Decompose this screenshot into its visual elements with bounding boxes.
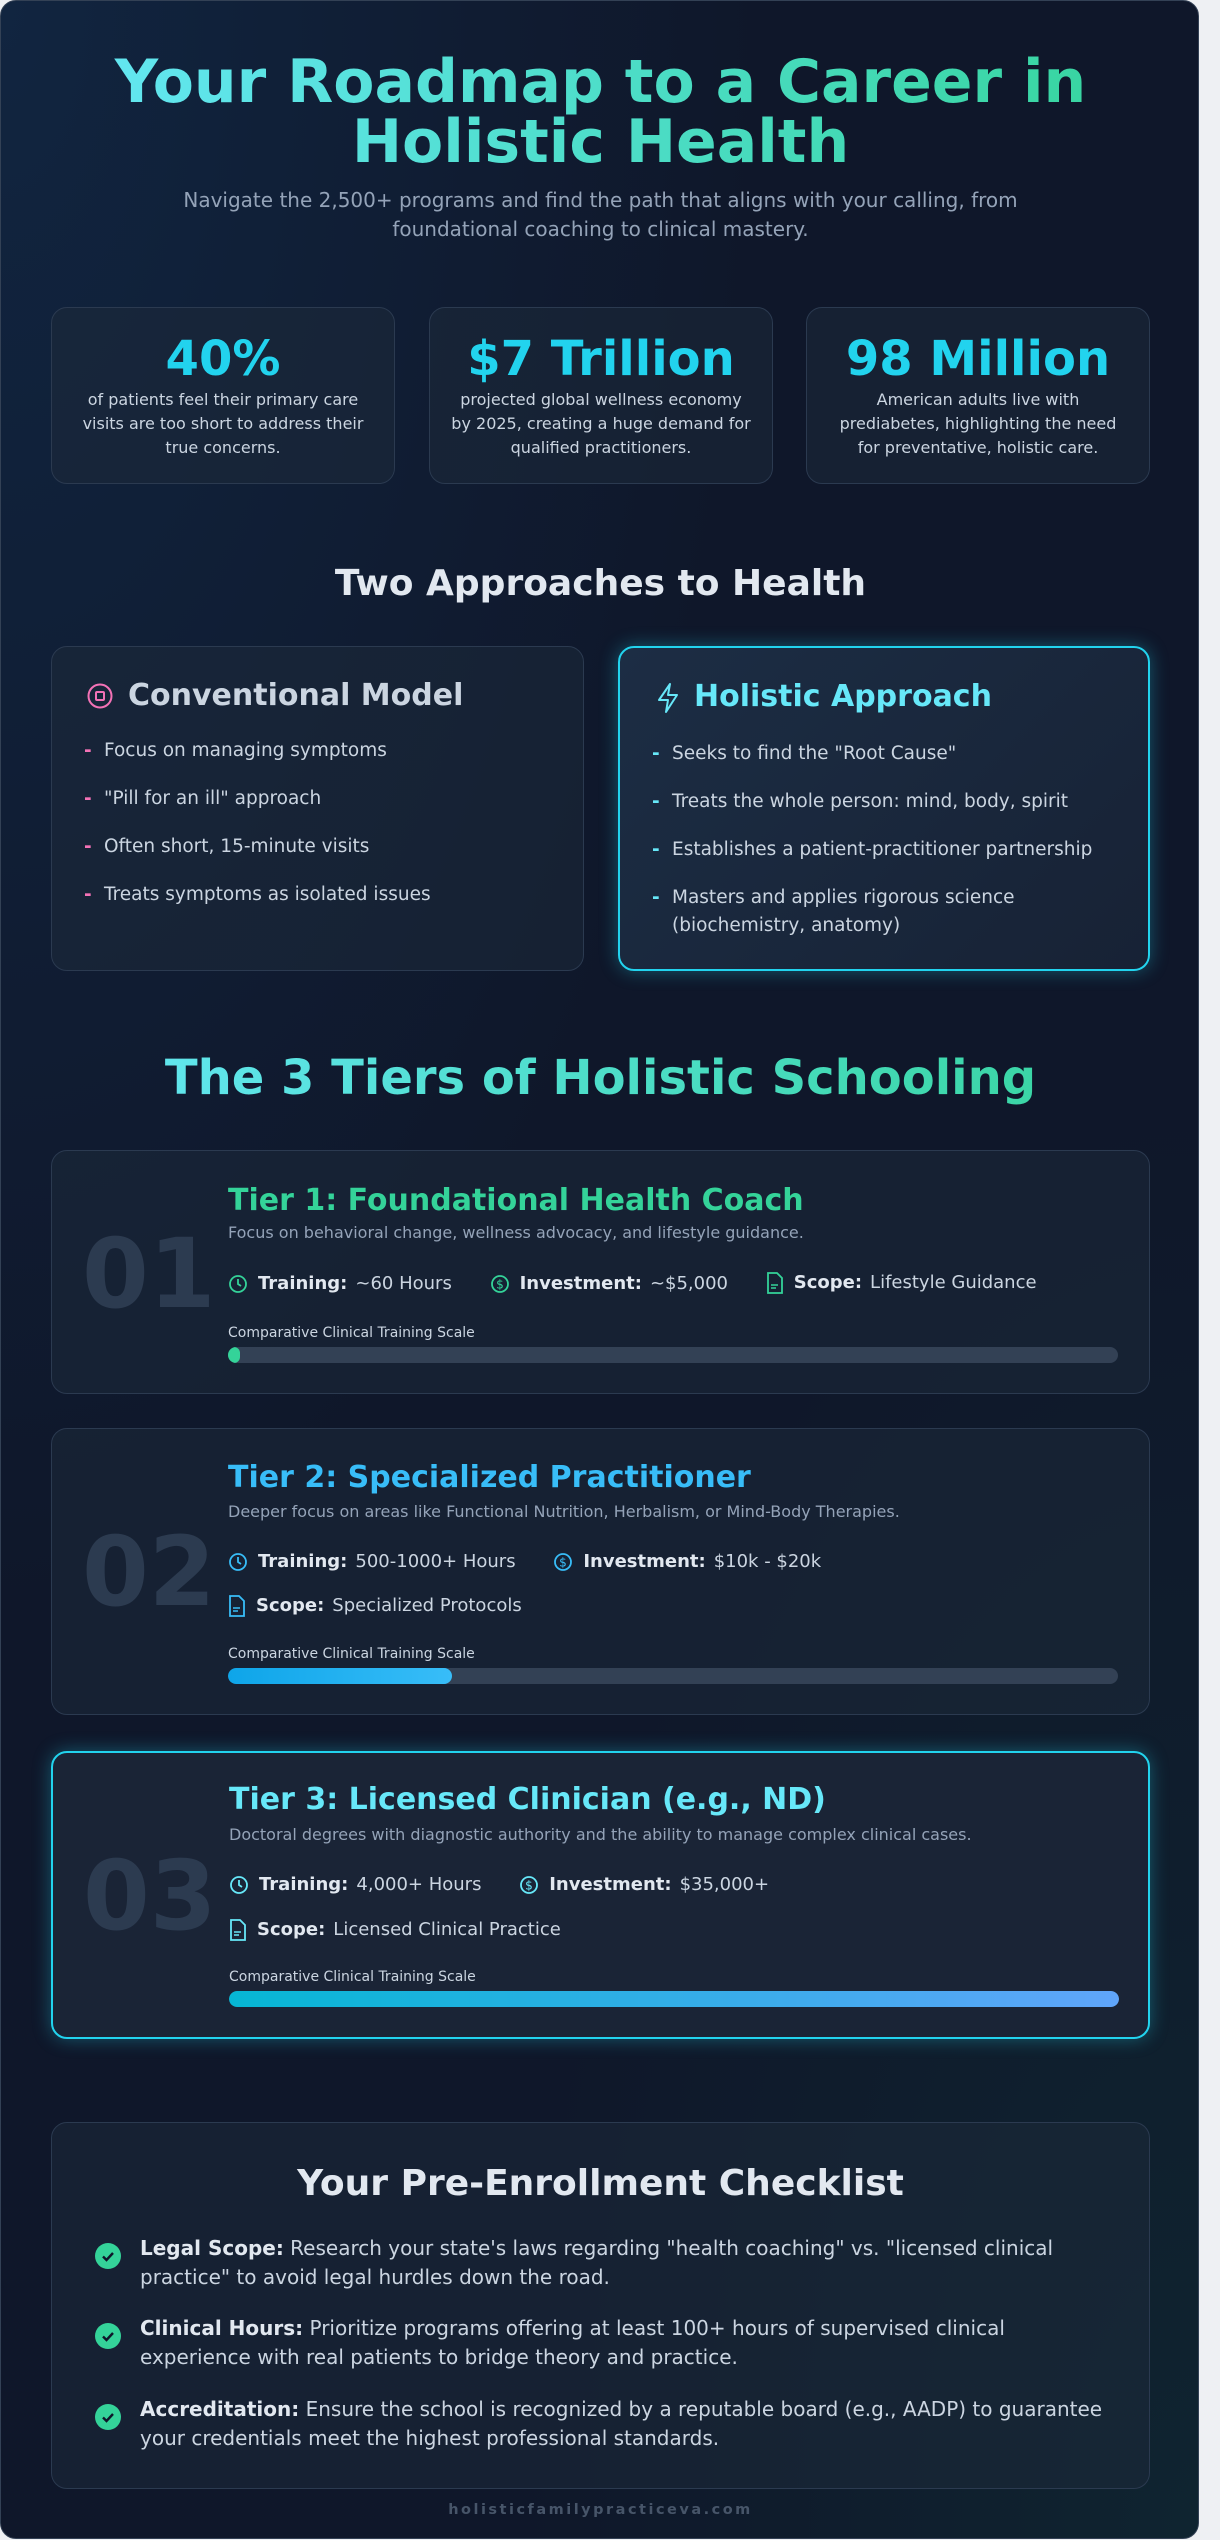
tier 1 (51, 1150, 1150, 1394)
meta: 4,000+ Hours (356, 1874, 481, 1895)
title: Your Roadmap to a Career in (115, 47, 1086, 117)
meta: $ (560, 1556, 567, 1570)
panel: holistic approach: (biochemistry, anatomy) (672, 915, 900, 936)
subtitle: Navigate the 2,500+ programs and find the path that aligns with your calling, from foundational coaching to clinical mastery. (183, 188, 1018, 241)
bar chart (228, 1646, 1118, 1684)
list (84, 740, 431, 905)
stat: 40% (51, 307, 395, 484)
bar chart (229, 1969, 1119, 2007)
number: 01 (82, 1218, 216, 1330)
checklist item: legal: practice" to avoid legal hurdles down the road. (140, 2265, 610, 2289)
meta: Investment: (520, 1273, 642, 1294)
meta: Investment: (549, 1874, 672, 1895)
tier 3: Licensed Clinical Practice (333, 1919, 561, 1940)
meta: Training: (259, 1874, 348, 1895)
panel: holistic approach: Seeks to find the "Root Cause" (672, 743, 956, 764)
meta: 500-1000+ Hours (355, 1551, 516, 1572)
tier 1: Focus on behavioral change, wellness advocacy, and lifestyle guidance. (228, 1223, 804, 1242)
panel: conventional model: "Pill for an ill" approach (104, 788, 321, 809)
panel: holistic approach: Treats the whole person: mind, body, spirit (672, 791, 1068, 812)
stat: $7 Trillion: $7 Trillion (467, 331, 735, 387)
meta: ~60 Hours (355, 1273, 452, 1294)
tier 2: Scope: (256, 1595, 324, 1616)
tier 3: Doctoral degrees with diagnostic authority and the ability to manage complex clinical cases. (229, 1825, 972, 1844)
tier 3: Scope: (257, 1919, 325, 1940)
meta (229, 1272, 1037, 1294)
tier title: Tier 2: Specialized Practitioner (228, 1460, 751, 1495)
tier title: Tier 1: Foundational Health Coach (228, 1183, 804, 1218)
stat: 98 Million: 98 Million (846, 331, 1110, 387)
icon: stop circle (88, 684, 112, 708)
panel: conventional model: - (84, 884, 92, 905)
panel: conventional model: - (84, 788, 92, 809)
stat: 40%: 40% (166, 331, 280, 387)
panel: holistic approach: Masters and applies rigorous science (672, 887, 1015, 908)
checklist item: accreditation (95, 2397, 1102, 2450)
number: 03 (83, 1840, 217, 1952)
heading: Conventional Model (128, 678, 463, 713)
panel: checklist (51, 2122, 1150, 2489)
heading: 3 tiers (1, 1047, 1200, 1109)
panel: holistic approach (618, 646, 1150, 971)
number: 02 (82, 1516, 216, 1628)
tier 2: Specialized Protocols (332, 1595, 522, 1616)
panel: holistic approach: - (652, 743, 660, 764)
panel: conventional model: - (84, 740, 92, 761)
heading: Holistic Approach (694, 679, 992, 714)
heading: two approaches: Two Approaches to Health (335, 563, 866, 604)
checklist item: accreditation: Accreditation: Ensure the school is recognized by a reputable board (e.g., AADP) to guarantee (140, 2397, 1102, 2421)
tier 3 (51, 1751, 1150, 2039)
tier 1: Comparative Clinical Training Scale (228, 1325, 475, 1341)
panel: holistic approach: - (652, 839, 660, 860)
checklist item: hours: Clinical Hours: Prioritize programs offering at least 100+ hours of supervised clinical (140, 2316, 1005, 2340)
meta: Training: (258, 1551, 347, 1572)
stat: 40%: of patients feel their primary care visits are too short to address their true concerns. (83, 390, 363, 457)
icon: lightning (658, 683, 678, 713)
meta: Scope: (794, 1272, 862, 1293)
meta (229, 1551, 821, 1572)
title: Holistic Health (352, 107, 849, 177)
meta: Investment: (583, 1551, 706, 1572)
tier 3: Comparative Clinical Training Scale (229, 1969, 476, 1985)
panel: conventional model: Focus on managing symptoms (104, 740, 387, 761)
stat: 98 Million: American adults live with prediabetes, highlighting the need for preventative, holistic care. (840, 390, 1116, 457)
bar chart (228, 1325, 1118, 1363)
title (1, 52, 1200, 172)
panel: conventional model: Treats symptoms as isolated issues (104, 884, 431, 905)
tier 2: Deeper focus on areas like Functional Nutrition, Herbalism, or Mind-Body Therapies. (228, 1502, 900, 1521)
meta: Lifestyle Guidance (870, 1272, 1037, 1293)
tier title: Tier 3: Licensed Clinician (e.g., ND) (229, 1782, 826, 1817)
list (652, 743, 1092, 936)
meta: $10k - $20k (714, 1551, 821, 1572)
tier 2: Comparative Clinical Training Scale (228, 1646, 475, 1662)
footer: holisticfamilypracticeva.com (448, 2502, 753, 2518)
stat: $7 Trillion: projected global wellness economy by 2025, creating a huge demand for qualified practitioners. (451, 390, 751, 457)
meta: Training: (258, 1273, 347, 1294)
panel: conventional model: - (84, 836, 92, 857)
panel: holistic approach: - (652, 887, 660, 908)
meta: $ (525, 1878, 533, 1892)
checklist item: accreditation: your credentials meet the highest professional standards. (140, 2426, 719, 2450)
checklist item: hours (95, 2316, 1005, 2369)
panel: conventional model (51, 646, 584, 971)
checklist item: legal (95, 2236, 1053, 2289)
checklist item: legal: Legal Scope: Research your state's laws regarding "health coaching" vs. "licensed clinical (140, 2236, 1053, 2260)
checklist item: hours: experience with real patients to bridge theory and practice. (140, 2345, 738, 2369)
panel: holistic approach: - (652, 791, 660, 812)
panel: conventional model: Often short, 15-minute visits (104, 836, 369, 857)
meta: ~$5,000 (650, 1273, 728, 1294)
panel: holistic approach: Establishes a patient-practitioner partnership (672, 839, 1092, 860)
meta: $35,000+ (680, 1874, 769, 1895)
meta: $ (496, 1278, 503, 1292)
stat: $7 Trillion (429, 307, 773, 484)
stat: 98 Million (806, 307, 1150, 484)
heading: Your Pre-Enrollment Checklist (297, 2163, 904, 2204)
tier 2 (51, 1428, 1150, 1715)
meta (230, 1874, 769, 1895)
heading: 3 tiers: The 3 Tiers of Holistic Schooling (165, 1050, 1036, 1106)
